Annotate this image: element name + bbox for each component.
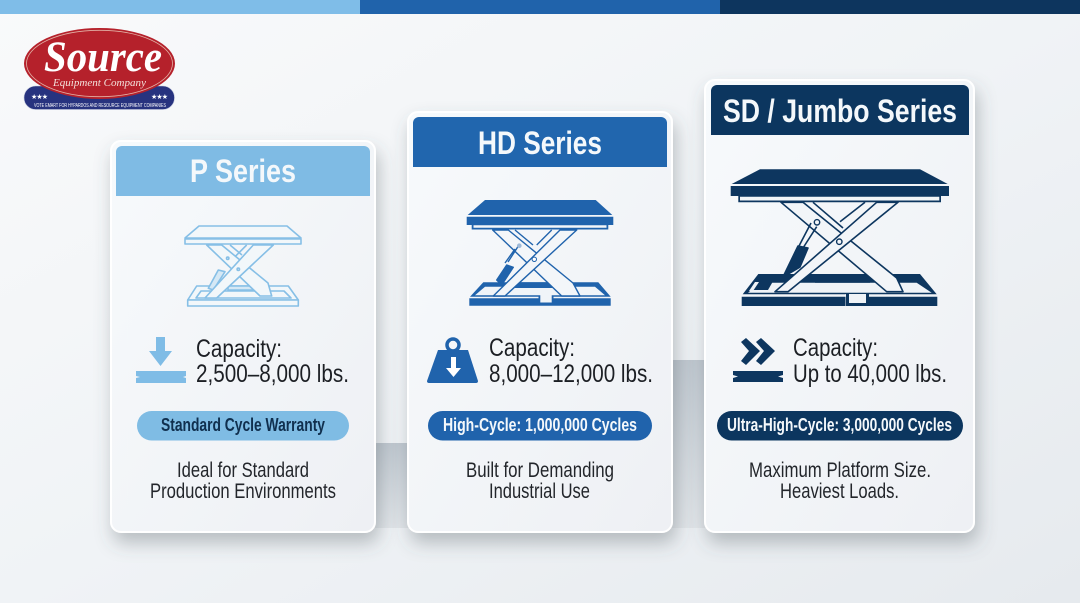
capacity icon: down arrow on slab [136, 337, 186, 383]
heading: P Series [116, 146, 370, 196]
warranty pill: Ultra-High-Cycle: 3,000,000 Cycles [727, 415, 952, 435]
capacity text: 8,000–12,000 lbs. [489, 360, 653, 388]
logo: Source Equipment Company: Source [44, 34, 162, 81]
warranty pill [137, 411, 349, 440]
warranty pill [428, 411, 652, 440]
description: Production Environments [150, 480, 336, 503]
capacity icon: double chevron on slab [733, 338, 783, 382]
warranty pill [717, 411, 963, 440]
capacity text: Capacity: [793, 334, 878, 362]
heading: HD Series: HD Series [478, 125, 602, 161]
panel: HD Series [408, 112, 672, 532]
description [466, 459, 614, 503]
description: Built for Demanding [466, 459, 614, 482]
top colour bar [0, 0, 1080, 14]
description: Ideal for Standard [177, 459, 309, 482]
capacity text: 2,500–8,000 lbs. [196, 360, 349, 388]
icon: SD / Jumbo Series scissor lift [731, 169, 949, 306]
capacity text [489, 334, 653, 388]
capacity text [196, 335, 349, 388]
capacity text [793, 334, 947, 388]
description: Maximum Platform Size. [749, 459, 931, 482]
capacity text: Up to 40,000 lbs. [793, 360, 947, 388]
icon: HD Series scissor lift [467, 200, 613, 306]
description: Industrial Use [489, 480, 590, 503]
logo: Source Equipment Company: VOTE EMART FOR HYPARDOS AND RESOURCE EQUIPMENT COMPANIES [34, 103, 166, 109]
capacity text: Capacity: [196, 335, 282, 363]
icon: P Series scissor lift [185, 226, 301, 306]
heading: SD / Jumbo Series [711, 85, 969, 135]
panel: P Series [111, 141, 375, 532]
logo: Source Equipment Company: Equipment Company [52, 78, 146, 89]
logo: Source Equipment Company: ★★★ [31, 93, 48, 101]
logo: Source Equipment Company: ★★★ [151, 93, 168, 101]
description [150, 459, 336, 503]
capacity text: Capacity: [489, 334, 575, 362]
heading: P Series: P Series [190, 153, 296, 189]
warranty pill: Standard Cycle Warranty [161, 415, 325, 435]
panel: SD / Jumbo Series [705, 80, 974, 532]
capacity icon: weight [427, 339, 478, 383]
heading: HD Series [413, 117, 667, 167]
description: Heaviest Loads. [780, 480, 899, 503]
logo: Source Equipment Company [24, 28, 175, 110]
description [749, 459, 931, 503]
warranty pill: High-Cycle: 1,000,000 Cycles [443, 415, 637, 435]
heading: SD / Jumbo Series: SD / Jumbo Series [723, 93, 957, 129]
